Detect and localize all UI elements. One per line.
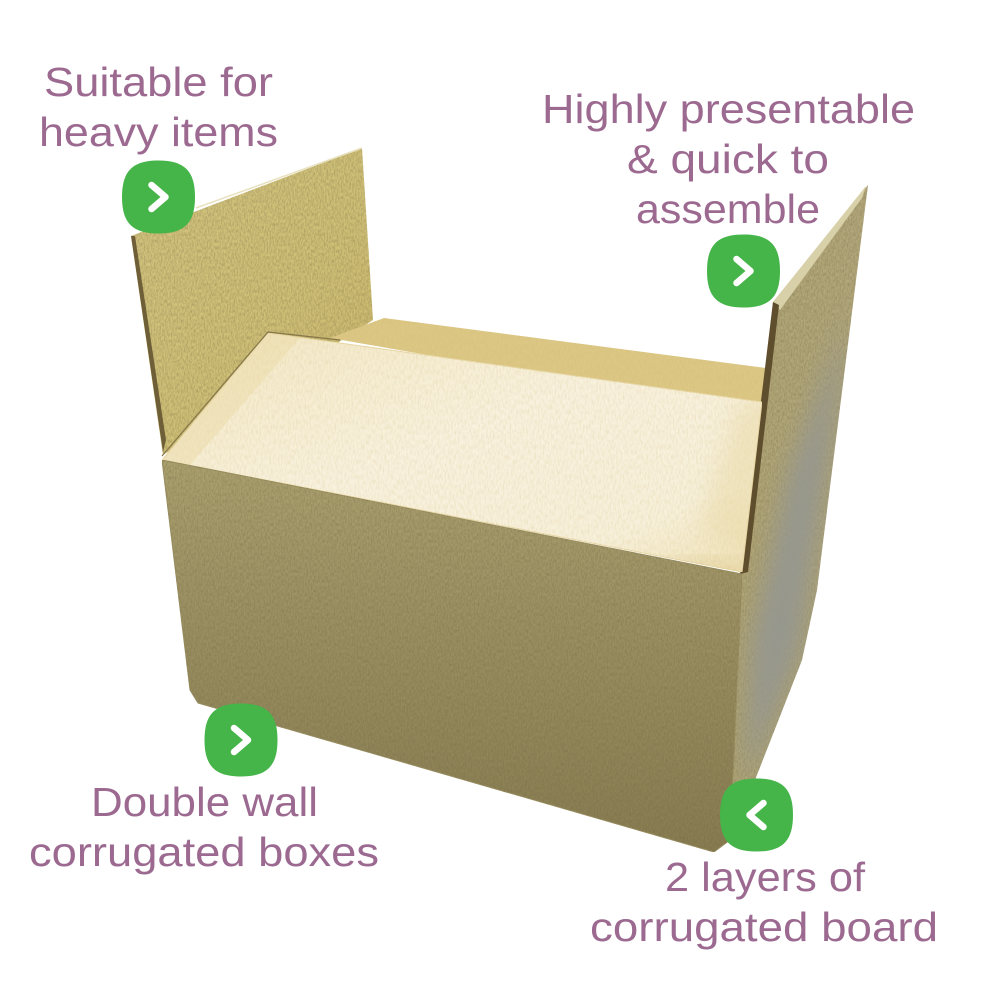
cardboard box <box>131 148 868 852</box>
text: highly presentable and quick to assemble: assemble <box>636 186 820 232</box>
text: 2 layers of corrugated board: 2 layers of <box>665 854 866 900</box>
inner back flap <box>330 318 766 404</box>
icon: chevron right button <box>204 704 278 776</box>
front face <box>162 460 742 852</box>
callout: 2 layers of corrugated board <box>590 778 938 950</box>
left flap <box>131 148 373 455</box>
text: suitable for heavy items: Suitable for <box>44 59 273 105</box>
text: suitable for heavy items <box>39 59 278 155</box>
icon: chevron left button <box>720 778 793 852</box>
text: highly presentable and quick to assemble: & quick to <box>627 136 829 182</box>
callout: double wall corrugated boxes <box>29 704 379 875</box>
text: suitable for heavy items: heavy items <box>39 109 278 155</box>
top flap <box>162 332 780 590</box>
text: double wall corrugated boxes <box>29 779 379 875</box>
text: 2 layers of corrugated board: corrugated board <box>590 904 938 950</box>
text: 2 layers of corrugated board <box>590 854 938 950</box>
text: double wall corrugated boxes: Double wall <box>91 779 318 825</box>
right side panel <box>730 185 868 835</box>
icon: chevron right button <box>707 234 780 308</box>
text: highly presentable and quick to assemble <box>542 86 915 232</box>
icon: chevron right button <box>122 160 195 234</box>
infographic canvas <box>30 66 936 950</box>
text: double wall corrugated boxes: corrugated boxes <box>29 829 379 875</box>
text: highly presentable and quick to assemble: Highly presentable <box>542 86 915 132</box>
callout: suitable for heavy items <box>39 59 278 234</box>
callout: highly presentable <box>542 86 915 308</box>
